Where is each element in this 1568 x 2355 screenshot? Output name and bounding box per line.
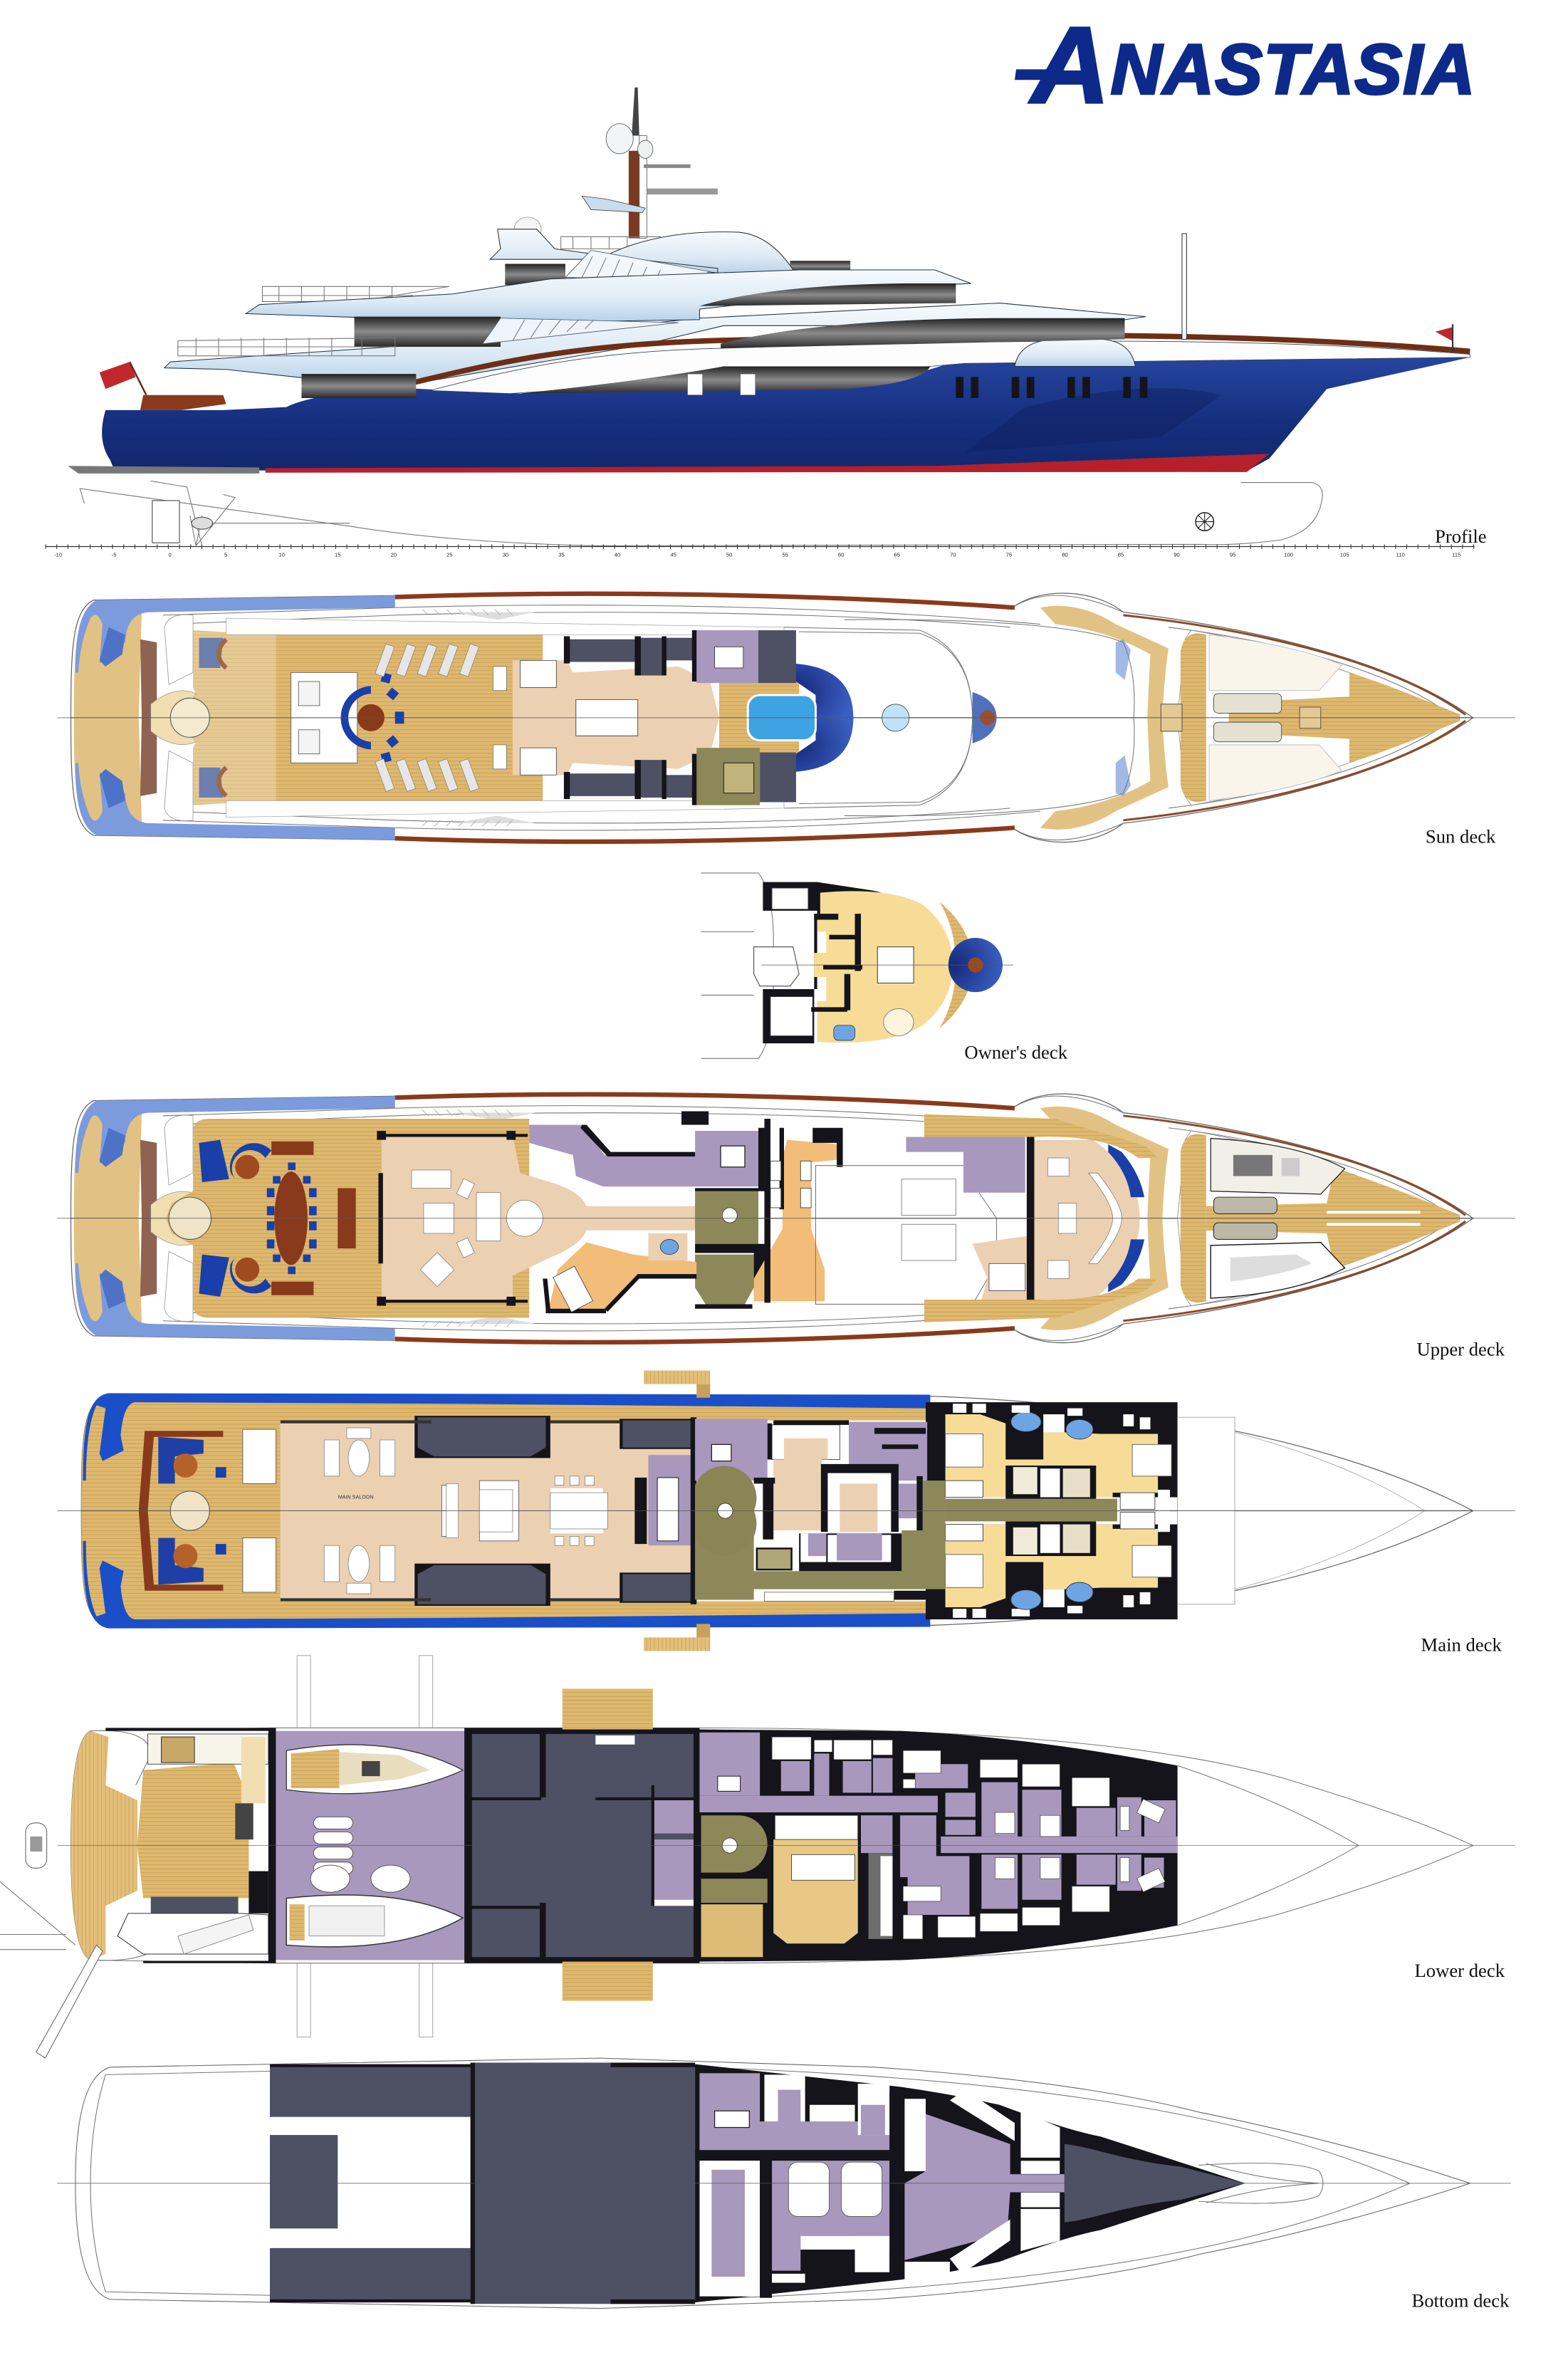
white tub berths [788, 2162, 882, 2216]
black walls around galley [754, 1420, 926, 1540]
frame scale: 90 [1174, 551, 1180, 558]
stair box [715, 2111, 749, 2128]
stair purple [899, 1483, 916, 1518]
forward wall [1027, 1137, 1034, 1302]
frame scale: 75 [1006, 551, 1012, 558]
lower deck plan [0, 1656, 1515, 2058]
stern teak [71, 1731, 137, 1960]
frame scale: 20 [391, 551, 397, 558]
hull outline [71, 1728, 1473, 1963]
port tender [286, 1745, 463, 1794]
black structure [763, 882, 904, 1043]
logo: Anastasia [1015, 5, 1476, 126]
centreline [57, 1218, 1515, 1219]
centreline [57, 1845, 1515, 1847]
spiral stair [169, 1197, 211, 1239]
frame scale: 40 [615, 551, 620, 558]
sun deck plan [57, 593, 1515, 842]
dining table and chairs [267, 1162, 317, 1274]
spiral stair [170, 698, 209, 737]
capstans on foredeck [1161, 704, 1321, 731]
aft service rooms [754, 888, 812, 1036]
bath [834, 1008, 914, 1040]
olive stair block [696, 748, 796, 805]
forward cabin columns [981, 1782, 1176, 1908]
tank garage grey [467, 1730, 696, 1962]
forward purple corridor [906, 1137, 1025, 1193]
starboard guest cabin [549, 1243, 696, 1309]
label: Owner's deck: Owner's deck [964, 1041, 1068, 1062]
frame scale: 5 [224, 551, 227, 558]
guest cabins aft port [781, 1753, 976, 1835]
owner's room forward [815, 1166, 997, 1304]
brown cap rail [399, 335, 1470, 386]
frame scale: 95 [1230, 551, 1235, 558]
central forward corridor [941, 1837, 1178, 1853]
guest cabin beds aft port [772, 1737, 941, 1788]
frame scale: 60 [838, 551, 844, 558]
dome centre [882, 704, 909, 731]
frame scale: 30 [503, 551, 508, 558]
black wall lines [580, 1111, 764, 1191]
second superstructure layer [164, 303, 1146, 387]
lobby purple aft [699, 2073, 760, 2150]
white stores with purple [764, 2074, 889, 2135]
pool [748, 695, 815, 741]
boot stripe [266, 454, 1270, 473]
central purple area [770, 2161, 889, 2271]
galley floor [773, 1438, 827, 1530]
owner's suite floor [814, 891, 953, 1043]
forward saloon [1034, 1140, 1140, 1300]
upper deck plan [57, 1094, 1515, 1343]
davit rails [297, 1656, 433, 2037]
frame scale: 15 [335, 551, 341, 558]
sun deck arch and fin [490, 217, 850, 285]
port lounge [199, 1140, 313, 1182]
central orange corridor [754, 1140, 840, 1301]
washroom [757, 1548, 792, 1570]
horizontal black bulkhead [695, 2093, 1065, 2298]
purple bar [634, 1455, 691, 1545]
jet skis [310, 1817, 410, 1892]
cabin bed [553, 1266, 592, 1312]
frame scale: 110 [1396, 551, 1405, 558]
dark seating [151, 1897, 239, 1913]
forward cabin beds [980, 1760, 1165, 1931]
main deck plan [57, 1371, 1515, 1651]
swim platform [68, 466, 259, 474]
teak arc [939, 902, 973, 1028]
pantry block [799, 1533, 901, 1571]
purple cross corridor [699, 2121, 889, 2150]
skylights [901, 1179, 956, 1260]
label: Sun deck: Sun deck [1426, 826, 1496, 847]
side boarding platforms [644, 1371, 710, 1651]
foredeck aerial [1182, 234, 1186, 339]
underwater hull lines [80, 483, 1322, 545]
owner's stateroom yellow floor [773, 1839, 858, 1943]
garage white hatch [595, 1735, 634, 1745]
bow thruster [1196, 513, 1213, 531]
label: Profile: Profile [1435, 526, 1487, 547]
bulkhead lines [270, 2062, 695, 2304]
hull [102, 357, 1470, 472]
inner bow line [1178, 1765, 1359, 1926]
forward crew lobby purple [849, 1422, 927, 1481]
starboard tender on foredeck [1211, 1243, 1345, 1298]
white aft starboard room [699, 2161, 760, 2297]
stair wall [892, 1812, 900, 1881]
frame scale: 35 [558, 551, 565, 558]
beach club teak floor [137, 1763, 249, 1899]
purple stair lobby [695, 1419, 768, 1481]
frame scale: 70 [950, 551, 956, 558]
window bands [301, 283, 1125, 398]
forward roof outline [784, 627, 973, 808]
label: Bottom deck: Bottom deck [1411, 2289, 1510, 2311]
stern deckhouse [140, 395, 226, 410]
garage black lines [464, 1728, 699, 1963]
mast and radar [561, 88, 718, 249]
logo: Anastasia: NASTASIA [1111, 30, 1476, 109]
profile view of the yacht [68, 88, 1470, 545]
centreline [57, 717, 1515, 719]
owner's deck plan [701, 873, 1013, 1058]
aft white curves [90, 1730, 166, 1960]
inner lines [90, 2064, 1410, 2302]
winch group [1213, 1223, 1277, 1239]
logo: Anastasia: A [1028, 5, 1111, 126]
tan room [701, 1904, 763, 1957]
lower port cabin beds [903, 1886, 976, 1939]
label: Main deck: Main deck [1421, 1634, 1502, 1655]
centreline [57, 1510, 1515, 1512]
bow bulb outline [1198, 2163, 1323, 2203]
rudder and propeller [151, 481, 350, 545]
grey locker column [869, 1853, 892, 1939]
spiral stair olive [701, 1815, 768, 1903]
centre table in sky lounge [576, 699, 638, 736]
saloon centre furniture: MAIN SALOON [338, 1494, 374, 1500]
tender bay [276, 1731, 467, 1960]
frame scale: 25 [446, 551, 453, 558]
frame scale: 85 [1118, 551, 1124, 558]
central stair and lobby purple [861, 1815, 969, 1915]
lower white stores [770, 2236, 889, 2283]
sleeping bed [877, 947, 914, 983]
frame scale: 55 [782, 551, 788, 558]
side deck teak [924, 1114, 1158, 1322]
galley core white [827, 1473, 891, 1532]
centreline [57, 2183, 1511, 2184]
forward saloon furniture [1048, 1158, 1122, 1278]
aft teak deck [166, 1119, 529, 1318]
washroom with blue basin [648, 1233, 687, 1260]
frame scale [46, 547, 1475, 558]
frame scale: 65 [894, 551, 900, 558]
cabins mirrored oval baths [1011, 1582, 1093, 1609]
lower rails [178, 338, 395, 356]
frame scale: 105 [1340, 551, 1349, 558]
aft corridor and purple block [529, 1125, 758, 1186]
blue dome [948, 938, 1003, 992]
black partitions [811, 914, 862, 1012]
dark forepeak [1065, 2144, 1245, 2223]
forward white bunks [904, 2090, 1060, 2286]
frame scale: -5 [112, 551, 116, 558]
starboard tender [286, 1895, 463, 1947]
saloon walls [377, 1131, 528, 1306]
galley counters [772, 1425, 840, 1460]
stair lobby purple [699, 1733, 760, 1796]
forward dome accent [980, 710, 995, 725]
bottom deck plan [57, 2058, 1511, 2309]
central black columns [764, 1119, 843, 1302]
frame scale: 0 [169, 551, 172, 558]
garage purple [654, 1800, 694, 1903]
frame scale: 50 [726, 551, 732, 558]
wheelhouse bump [1015, 339, 1135, 367]
shell door platforms [563, 1688, 653, 2001]
owner's deck outline [701, 873, 773, 1058]
sun deck table [357, 704, 385, 731]
frame scale: 45 [670, 551, 676, 558]
white stores aft of stair [611, 1125, 695, 1149]
cross corridor [699, 1796, 938, 1812]
forward pink cabin [973, 1235, 1034, 1304]
tank dark grey aft top [270, 2066, 471, 2117]
purple aft starboard passage [711, 2170, 745, 2277]
port tender on foredeck [1211, 1139, 1345, 1194]
dome centre [968, 957, 983, 973]
white bulwark band [429, 341, 1470, 394]
frame scale: 115 [1452, 551, 1460, 558]
galley core floor [840, 1483, 877, 1532]
aft sideboard [338, 1188, 356, 1248]
olive spiral stair and corridor [695, 1466, 1117, 1602]
bow flag [1436, 324, 1453, 351]
tank dark grey aft bottom [270, 2248, 471, 2302]
beach club aft bar [148, 1734, 268, 1839]
portholes [956, 377, 1147, 398]
hull outline [75, 2058, 1470, 2309]
label: Upper deck: Upper deck [1416, 1338, 1505, 1359]
aft purple stair block [696, 630, 796, 683]
wall strip [691, 1417, 696, 1604]
blue window sofas [1108, 1144, 1144, 1293]
forward black hull [696, 1730, 1178, 1962]
top deck rail [262, 286, 449, 301]
forward black hull wedge [695, 2064, 1245, 2302]
saloon centre furniture [338, 1483, 607, 1538]
owner's beds [775, 1815, 858, 1880]
label: Lower deck: Lower deck [1415, 1960, 1505, 1981]
frame scale: -10 [54, 551, 62, 558]
top superstructure layer [246, 270, 971, 323]
engine room dark [472, 2062, 695, 2304]
gangway, tender and lines at stern [0, 1823, 103, 2058]
spiral stair olive [695, 1188, 766, 1309]
frame scale: 10 [278, 551, 285, 558]
forward purple compartment [904, 2114, 1065, 2260]
main saloon floor [382, 1134, 696, 1301]
stern swim platform [117, 1913, 268, 1954]
saloon furniture [412, 1170, 543, 1287]
starboard lounge [199, 1255, 313, 1297]
frame scale: 100 [1284, 551, 1293, 558]
white boxes in walls [770, 1161, 811, 1208]
aft hatch dark [105, 1728, 276, 1963]
hull shading streaks [965, 388, 1221, 452]
spiral stair aft [170, 1491, 209, 1530]
galley core black frame [821, 1464, 899, 1532]
ensign at stern [100, 362, 146, 395]
frame scale: 80 [1062, 551, 1068, 558]
cabin wall [543, 1274, 696, 1313]
tank dark centre [270, 2135, 338, 2228]
